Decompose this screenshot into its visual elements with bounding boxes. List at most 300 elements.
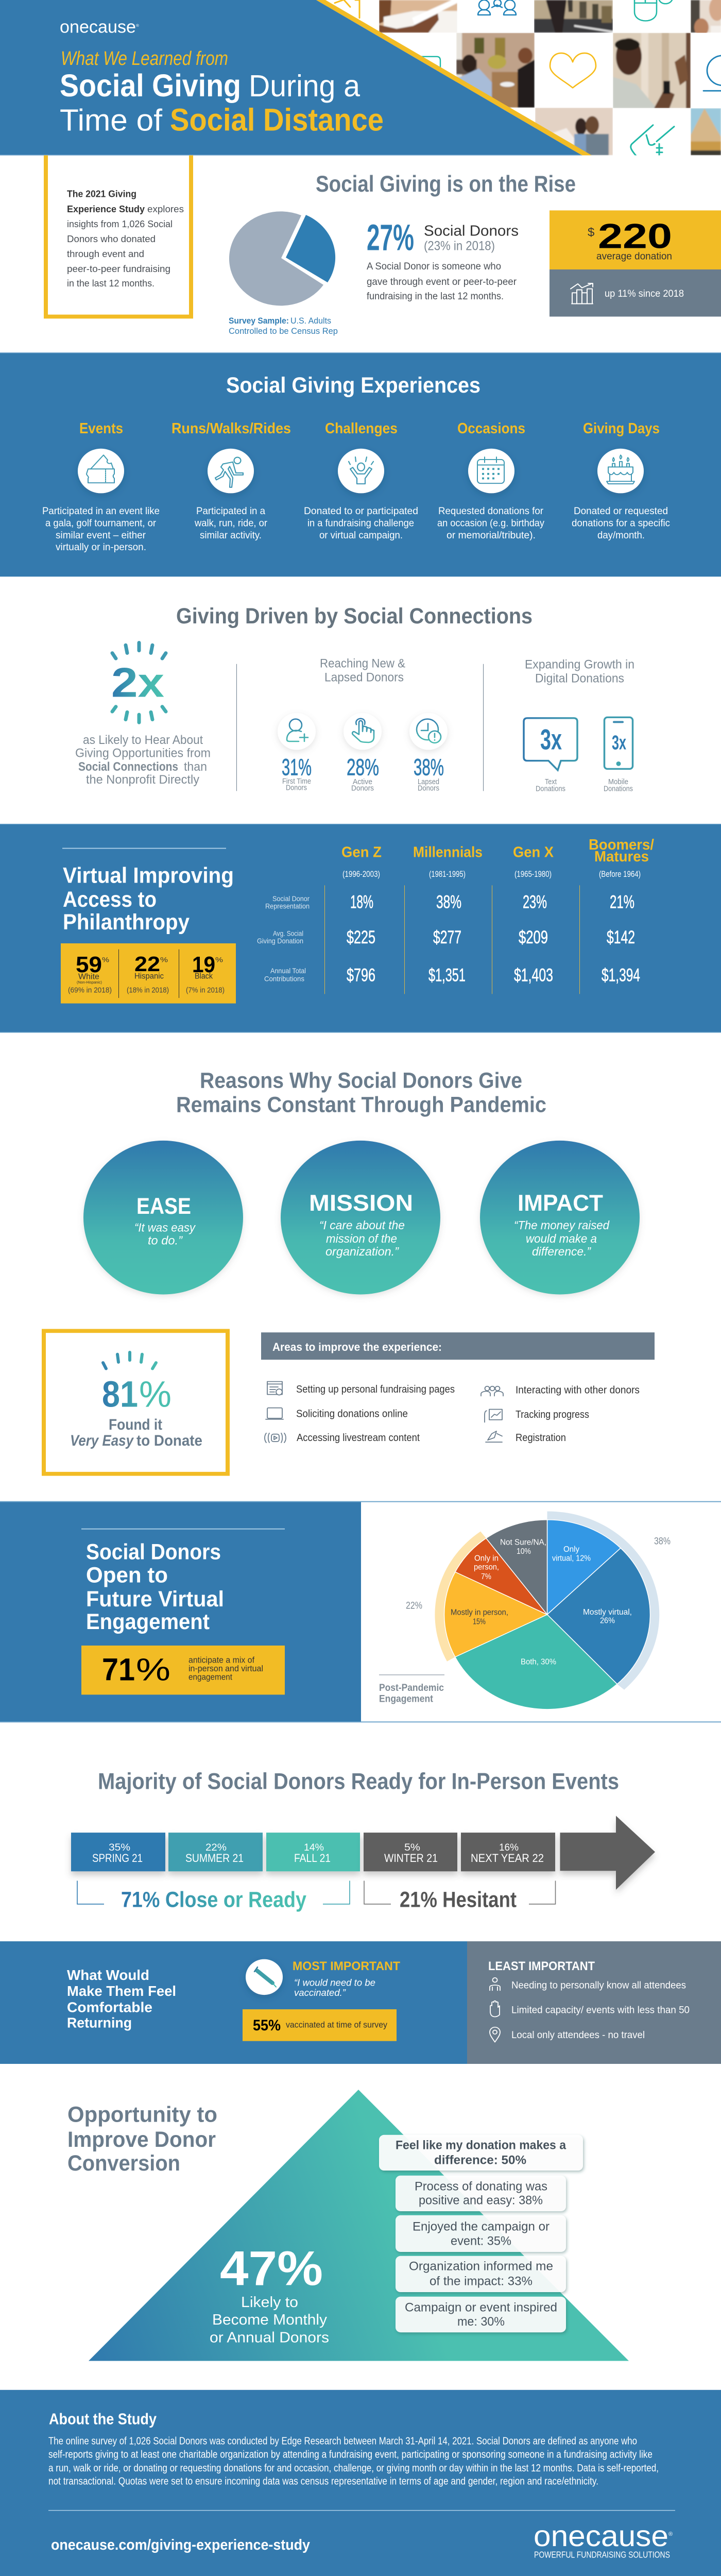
slice labels: 7% — [481, 1572, 491, 1581]
card: enjoyed campaign: Enjoyed the campaign or — [413, 2220, 550, 2233]
circle: mission: MISSION — [309, 1190, 413, 1216]
card: informed of impact: of the impact: 33% — [430, 2275, 533, 2288]
row: annual contributions: $1,394 — [602, 964, 640, 985]
photo: couple on sofa — [535, 108, 613, 155]
circle: ease: to do.” — [148, 1234, 183, 1247]
panel: least important: LEAST IMPORTANT — [488, 1959, 595, 1973]
slice labels: 15% — [473, 1618, 486, 1626]
stat: text donations: 3x — [540, 723, 562, 756]
stat: 27 percent social donors: A Social Donor is someone who — [367, 261, 501, 272]
column: runs walks rides: similar activity. — [200, 530, 262, 541]
panel: giving driven by social connections — [75, 604, 634, 793]
stat: hispanic: % — [160, 956, 168, 964]
block: next year 22 — [461, 1833, 555, 1871]
callout: 21 percent hesitant: 21% Hesitant — [400, 1888, 517, 1912]
stat: 81 percent: % — [139, 1374, 171, 1415]
row: annual contributions — [347, 964, 640, 985]
card: makes a difference — [379, 2135, 583, 2171]
stat: hispanic: (18% in 2018) — [127, 987, 169, 994]
callout: 71 percent — [81, 1646, 285, 1694]
stat: 2x — [75, 642, 211, 787]
birth years: (1996-2003) — [342, 869, 380, 879]
chart: 27 percent pie — [229, 211, 335, 306]
column: occasions — [437, 420, 545, 541]
item: local only: Local only attendees - no travel — [511, 2029, 645, 2041]
item: registration: Registration — [516, 1432, 566, 1444]
stat: hispanic: Hispanic — [134, 972, 164, 980]
column: expanding digital donations: Expanding Growth in — [525, 658, 634, 671]
column: occasions: an occasion (e.g. birthday — [437, 518, 545, 529]
intro text: in the last 12 months. — [67, 278, 154, 289]
circle: mission: organization.” — [325, 1245, 399, 1258]
circle: ease: “It was easy — [134, 1221, 196, 1234]
icon: computer mouse — [634, 0, 672, 21]
stat: white: (Non-Hispanic) — [77, 980, 102, 985]
callout: 55 percent vaccinated: vaccinated at time of survey — [286, 2020, 388, 2030]
logo: POWERFUL FUNDRAISING SOLUTIONS — [534, 2550, 670, 2560]
callout: 55 percent vaccinated: 55% — [253, 2016, 281, 2034]
card: informed of impact — [396, 2256, 566, 2292]
panel: open to future virtual engagement — [0, 1501, 721, 1722]
title: Social Giving — [60, 68, 241, 104]
heading — [176, 1069, 546, 1117]
block: spring 21: 35% — [109, 1842, 130, 1853]
row labels — [257, 895, 310, 982]
stat: 2x: Social Connections — [78, 760, 178, 774]
logo: ® — [136, 23, 139, 28]
panel: 81 percent very easy: Very Easy — [70, 1432, 134, 1449]
block: winter 21: 5% — [404, 1842, 420, 1853]
block: summer 21: 22% — [205, 1842, 227, 1853]
stat: white: % — [102, 956, 109, 964]
circle: impact — [480, 1141, 640, 1295]
column: reaching new and lapsed donors: Lapsed Donors — [324, 671, 404, 684]
stat: mobile donations: Donations — [604, 785, 633, 793]
heading: Access to — [63, 887, 157, 912]
stat: first time donors — [278, 713, 316, 792]
stat: 2x: Giving Opportunities from — [75, 747, 211, 760]
heading — [86, 1540, 224, 1634]
column: challenges: or virtual campaign. — [319, 530, 403, 541]
most important — [293, 1959, 400, 1998]
column: reaching new and lapsed donors: Reaching New & — [320, 657, 405, 670]
survey sample note: Survey Sample: — [229, 315, 289, 326]
study description: not transactional. Quotas were set to ensure incoming data was census representative in terms of age and gender, region and race/ethnicity. — [48, 2476, 598, 2487]
slice labels: Only — [563, 1545, 579, 1554]
intro text — [67, 189, 184, 289]
panel: intro box — [46, 155, 191, 317]
item: livestream: Accessing livestream content — [297, 1432, 420, 1444]
logo: onecause — [534, 2520, 668, 2553]
icon: growth chart — [571, 283, 593, 303]
heading — [63, 863, 234, 935]
photo: hand holding tablet — [379, 0, 457, 33]
card: process positive — [396, 2176, 566, 2211]
column headers: Gen X — [513, 844, 554, 860]
column: reaching new and lapsed donors — [278, 657, 448, 792]
block: spring 21 — [71, 1833, 165, 1871]
heading: Philanthropy — [63, 910, 190, 935]
logo: onecause — [60, 17, 136, 37]
row: representation — [350, 891, 634, 912]
item: limited capacity: Limited capacity/ events with less than 50 — [511, 2005, 690, 2016]
heading: Reasons Why Social Donors Give — [200, 1069, 522, 1093]
card: process positive: positive and easy: 38% — [419, 2194, 543, 2207]
stat: 27 percent social donors: fundraising in the last 12 months. — [367, 291, 504, 302]
icon: cheering person — [349, 457, 373, 484]
stat: active donors: 28% — [347, 754, 379, 780]
panel: average donation: average donation — [596, 251, 672, 262]
link: onecause.com/giving-experience-study — [51, 2536, 311, 2553]
icon: laptop with speech — [703, 56, 721, 91]
stat: active donors: Donors — [351, 785, 374, 792]
stat: black: 19 — [192, 953, 215, 977]
column: runs walks rides: Participated in a — [196, 505, 266, 517]
stat: white: White — [78, 973, 99, 981]
slice labels — [451, 1538, 632, 1667]
row: representation: 18% — [350, 891, 373, 912]
intro text: The 2021 Giving — [67, 189, 136, 199]
stat: 27 percent social donors: gave through event or peer-to-peer — [367, 276, 517, 287]
block: fall 21: FALL 21 — [294, 1852, 331, 1865]
row: average donation: $225 — [347, 927, 375, 947]
row: annual contributions: $796 — [347, 964, 375, 985]
heading: Virtual Improving — [63, 863, 234, 888]
block: summer 21 — [168, 1833, 263, 1871]
column: challenges: in a fundraising challenge — [307, 518, 414, 529]
circle: impact: difference.” — [532, 1245, 591, 1258]
icon: tickets — [87, 455, 114, 483]
survey sample note — [229, 315, 338, 336]
icon: running shoe — [631, 125, 674, 159]
column: giving days: Donated or requested — [574, 505, 668, 517]
item: tracking: Tracking progress — [516, 1409, 589, 1420]
item: soliciting donations: Soliciting donations online — [296, 1408, 408, 1419]
stat: hispanic — [127, 953, 169, 994]
panel: what would make them comfortable — [0, 1941, 721, 2064]
heading: Make Them Feel — [67, 1983, 176, 1999]
row: average donation: $142 — [607, 927, 635, 947]
slice labels: Both, 30% — [521, 1658, 556, 1667]
subtitle: What We Learned from — [61, 48, 228, 70]
arc: 38 percent virtual — [547, 1511, 659, 1690]
stat: 47 percent: Likely to — [241, 2294, 298, 2311]
stat: white: 59 — [76, 953, 102, 977]
table: generations — [257, 836, 654, 994]
panel: areas to improve — [261, 1332, 655, 1444]
slices — [444, 1520, 650, 1709]
card: inspired: Campaign or event inspired — [405, 2301, 557, 2314]
intro text: Experience Study — [67, 205, 145, 215]
stat: 47 percent: or Annual Donors — [210, 2329, 329, 2346]
heading: Future Virtual — [86, 1587, 224, 1612]
stat: mobile donations: 3x — [612, 732, 626, 754]
callout: 55 percent vaccinated — [243, 2009, 397, 2041]
blue triangle — [0, 0, 582, 155]
column: events — [42, 420, 160, 553]
stat: 27 percent social donors — [367, 217, 519, 302]
circle: mission — [281, 1141, 440, 1295]
circle: ease — [83, 1141, 243, 1295]
birth years: (1965-1980) — [514, 869, 552, 879]
heading: About the Study — [49, 2410, 157, 2428]
column headers — [341, 836, 654, 865]
item: fundraising pages — [267, 1382, 455, 1395]
column headers: Boomers/ — [589, 836, 654, 853]
slice labels: person, — [474, 1563, 499, 1572]
chart caption: Post-Pandemic — [379, 1682, 444, 1693]
stat: text donations: Text — [545, 778, 557, 786]
column: runs walks rides: Runs/Walks/Rides — [171, 420, 291, 437]
panel: up 11 percent: up 11% since 2018 — [605, 288, 684, 299]
panel: opportunity to improve donor conversion — [67, 2090, 629, 2361]
item: limited capacity — [490, 2001, 690, 2016]
panel: footer about the study — [0, 2390, 721, 2576]
panel: ready for in-person events — [71, 1768, 655, 1912]
title: During a — [249, 69, 360, 103]
row: average donation: $277 — [433, 927, 461, 947]
study description — [48, 2435, 659, 2487]
slice labels: Not Sure/NA, — [500, 1538, 546, 1547]
most important: MOST IMPORTANT — [293, 1959, 400, 1973]
stat: lapsed donors: 38% — [414, 754, 444, 780]
title — [60, 68, 384, 138]
heading: Comfortable — [67, 1999, 152, 2015]
card: informed of impact: Organization informed me — [409, 2260, 553, 2274]
photo: restaurant dinner — [456, 33, 535, 108]
stat: text donations — [524, 718, 577, 793]
slice labels: virtual, 12% — [552, 1554, 591, 1563]
heading: Majority of Social Donors Ready for In-Person Events — [98, 1768, 619, 1794]
stat: first time donors: 31% — [282, 754, 312, 780]
intro text: explores — [147, 205, 184, 215]
stat: 81 percent: 81 — [102, 1374, 138, 1415]
item: tracking — [485, 1409, 589, 1422]
item: fundraising pages: Setting up personal fundraising pages — [296, 1383, 455, 1395]
intro text: Donors who donated — [67, 234, 156, 245]
card: makes a difference: difference: 50% — [434, 2154, 526, 2167]
circle: ease: EASE — [136, 1193, 191, 1219]
block: summer 21: SUMMER 21 — [185, 1852, 244, 1865]
stat: text donations: Donations — [536, 785, 565, 793]
panel: header — [0, 0, 721, 159]
stat: 47 percent: Become Monthly — [212, 2312, 327, 2328]
intro text: insights from 1,026 Social — [67, 219, 173, 230]
column: challenges — [304, 420, 418, 541]
stat: black: (7% in 2018) — [186, 987, 225, 994]
yellow stripe — [316, 0, 592, 155]
block: spring 21: SPRING 21 — [92, 1852, 143, 1865]
slice labels: Only in — [474, 1554, 499, 1563]
panel: reasons why social donors give — [83, 1069, 640, 1295]
survey sample note: Controlled to be Census Rep — [229, 326, 338, 336]
panel: 81 percent very easy: to Donate — [136, 1432, 202, 1449]
stat: first time donors: Donors — [286, 784, 307, 792]
column: giving days: Giving Days — [583, 420, 660, 437]
stat: 2x: as Likely to Hear About — [83, 733, 203, 747]
card: inspired: me: 30% — [457, 2315, 505, 2329]
photo: laughing woman — [691, 0, 721, 36]
heading: Returning — [67, 2015, 132, 2031]
callout: 71 percent close or ready — [77, 1881, 350, 1912]
chart caption: Engagement — [379, 1693, 433, 1704]
column: events: Participated in an event like — [42, 505, 160, 517]
heading: Giving Driven by Social Connections — [176, 604, 533, 629]
icon: birthday cake — [607, 455, 634, 484]
heading: Improve Donor — [67, 2128, 216, 2152]
block: winter 21: WINTER 21 — [384, 1852, 438, 1865]
intro text: peer-to-peer fundraising — [67, 264, 170, 275]
column: giving days — [572, 420, 670, 541]
photo: man with phone — [613, 33, 691, 108]
row labels: Contributions — [264, 975, 304, 982]
callout: 21 percent hesitant — [364, 1881, 555, 1912]
stat: lapsed donors: Lapsed — [418, 778, 439, 786]
panel: virtual improving access to philanthropy — [0, 824, 721, 1033]
column: events: a gala, golf tournament, or — [45, 518, 156, 529]
stat: 2x: than — [184, 760, 207, 774]
icon: heart — [550, 53, 596, 88]
stat: black: Black — [195, 972, 213, 980]
birth years — [342, 869, 641, 879]
slice labels: Mostly in person, — [451, 1608, 508, 1617]
heading — [67, 1968, 176, 2031]
slice labels: 10% — [517, 1547, 531, 1556]
block: fall 21 — [266, 1833, 360, 1871]
panel: race breakdown — [61, 943, 236, 1004]
column headers: Matures — [594, 849, 649, 865]
icon: ticket star — [335, 0, 359, 18]
stat: active donors — [344, 713, 382, 792]
panel: average donation — [550, 210, 721, 269]
birth years: (Before 1964) — [599, 869, 641, 879]
stat: hispanic: 22 — [134, 953, 160, 976]
heading — [67, 2103, 217, 2176]
chart: post-pandemic engagement pie: 38% — [654, 1536, 671, 1547]
item: know all attendees: Needing to personally know all attendees — [511, 1980, 686, 1991]
stat: 2x: 2x — [111, 659, 164, 706]
column: occasions: or memorial/tribute). — [447, 530, 536, 541]
callout: 71 percent: 71 — [102, 1652, 135, 1687]
item: registration — [486, 1431, 566, 1444]
stat: 81 percent — [102, 1374, 171, 1415]
column: challenges: Challenges — [325, 420, 398, 437]
block: winter 21 — [364, 1833, 457, 1871]
card: makes a difference: Feel like my donation makes a — [396, 2139, 566, 2153]
stat: 27 percent social donors: 27% — [367, 217, 414, 258]
heading: Remains Constant Through Pandemic — [176, 1093, 546, 1117]
photo: cyclists — [534, 0, 613, 33]
stat: 27 percent social donors: (23% in 2018) — [424, 239, 495, 253]
most important: vaccinated.” — [294, 1987, 346, 1998]
item: interacting: Interacting with other donors — [516, 1384, 640, 1396]
row: annual contributions: $1,351 — [428, 964, 466, 985]
icon: people group — [478, 0, 516, 15]
icon: calendar — [477, 457, 504, 483]
heading: Social Donors — [86, 1540, 221, 1564]
stat: lapsed donors — [409, 713, 448, 792]
row: representation: 23% — [523, 891, 547, 912]
item: local only — [490, 2027, 645, 2042]
callout: 71 percent close or ready: 71% Close or Ready — [121, 1888, 306, 1912]
row: average donation: $209 — [519, 927, 548, 947]
row labels: Avg. Social — [273, 930, 303, 938]
stat: 47 percent: 47% — [220, 2242, 323, 2296]
row labels: Social Donor — [272, 895, 310, 903]
row: average donation — [347, 927, 635, 947]
stat: lapsed donors: Donors — [418, 785, 439, 792]
card: enjoyed campaign: event: 35% — [451, 2234, 511, 2248]
callout: 71 percent: % — [136, 1652, 170, 1687]
logo: ® — [668, 2531, 673, 2537]
arc: 22 percent in person — [435, 1531, 486, 1662]
block: next year 22: NEXT YEAR 22 — [471, 1852, 544, 1865]
panel: least important — [467, 1941, 721, 2064]
column: giving days: donations for a specific — [572, 518, 670, 529]
icon: burst rays — [112, 642, 166, 722]
row: representation: 38% — [436, 891, 461, 912]
panel: social giving experiences — [0, 352, 721, 577]
stat: mobile donations: Mobile — [608, 778, 628, 786]
icon: syringe — [246, 1959, 283, 1995]
row: representation: 21% — [610, 891, 634, 912]
column: occasions: Occasions — [457, 420, 525, 437]
panel: 81 percent very easy: Found it — [109, 1416, 162, 1433]
panel: areas to improve: Areas to improve the experience: — [272, 1341, 442, 1353]
column: challenges: Donated to or participated — [304, 505, 418, 517]
column: occasions: Requested donations for — [438, 505, 543, 517]
row labels: Representation — [265, 903, 310, 910]
pyramid — [89, 2090, 629, 2361]
column headers: Gen Z — [341, 844, 382, 860]
timeline arrow — [560, 1816, 655, 1890]
most important: “I would need to be — [294, 1977, 375, 1988]
circle: impact: IMPACT — [518, 1190, 603, 1216]
column: runs walks rides: walk, run, ride, or — [194, 518, 267, 529]
icon: rays — [103, 1352, 156, 1369]
card: process positive: Process of donating was — [415, 2180, 547, 2193]
row: annual contributions: $1,403 — [514, 964, 553, 985]
heading: Conversion — [67, 2151, 180, 2176]
panel: average donation: 220 — [598, 217, 672, 256]
circle: mission: mission of the — [326, 1232, 397, 1245]
panel: up 11 percent — [550, 269, 721, 317]
column: events: Events — [79, 420, 123, 437]
slice labels: 26% — [600, 1617, 615, 1625]
column: expanding digital donations — [524, 658, 634, 793]
panel: 81 percent very easy — [44, 1331, 228, 1474]
stat: 2x: the Nonprofit Directly — [86, 773, 200, 787]
column: giving days: day/month. — [597, 530, 645, 541]
icon: teal card corner — [420, 57, 440, 67]
callout: 71 percent: engagement — [188, 1672, 232, 1682]
stat: black — [186, 953, 225, 994]
title: Time of — [60, 103, 162, 137]
column headers: Millennials — [413, 844, 483, 860]
column: events: similar event – either — [56, 530, 146, 541]
chart: post-pandemic engagement pie — [406, 1511, 671, 1709]
chart: post-pandemic engagement pie: 22% — [406, 1600, 422, 1612]
survey sample note: U.S. Adults — [290, 315, 331, 326]
stat: 47 percent — [210, 2242, 329, 2346]
circle: mission: “I care about the — [319, 1218, 405, 1232]
column: expanding digital donations: Digital Donations — [535, 672, 624, 685]
stat: black: % — [215, 956, 223, 964]
heading: Open to — [86, 1563, 168, 1587]
callout: 71 percent: in-person and virtual — [188, 1664, 263, 1673]
card: inspired — [396, 2297, 566, 2332]
title: Social Distance — [170, 102, 384, 138]
